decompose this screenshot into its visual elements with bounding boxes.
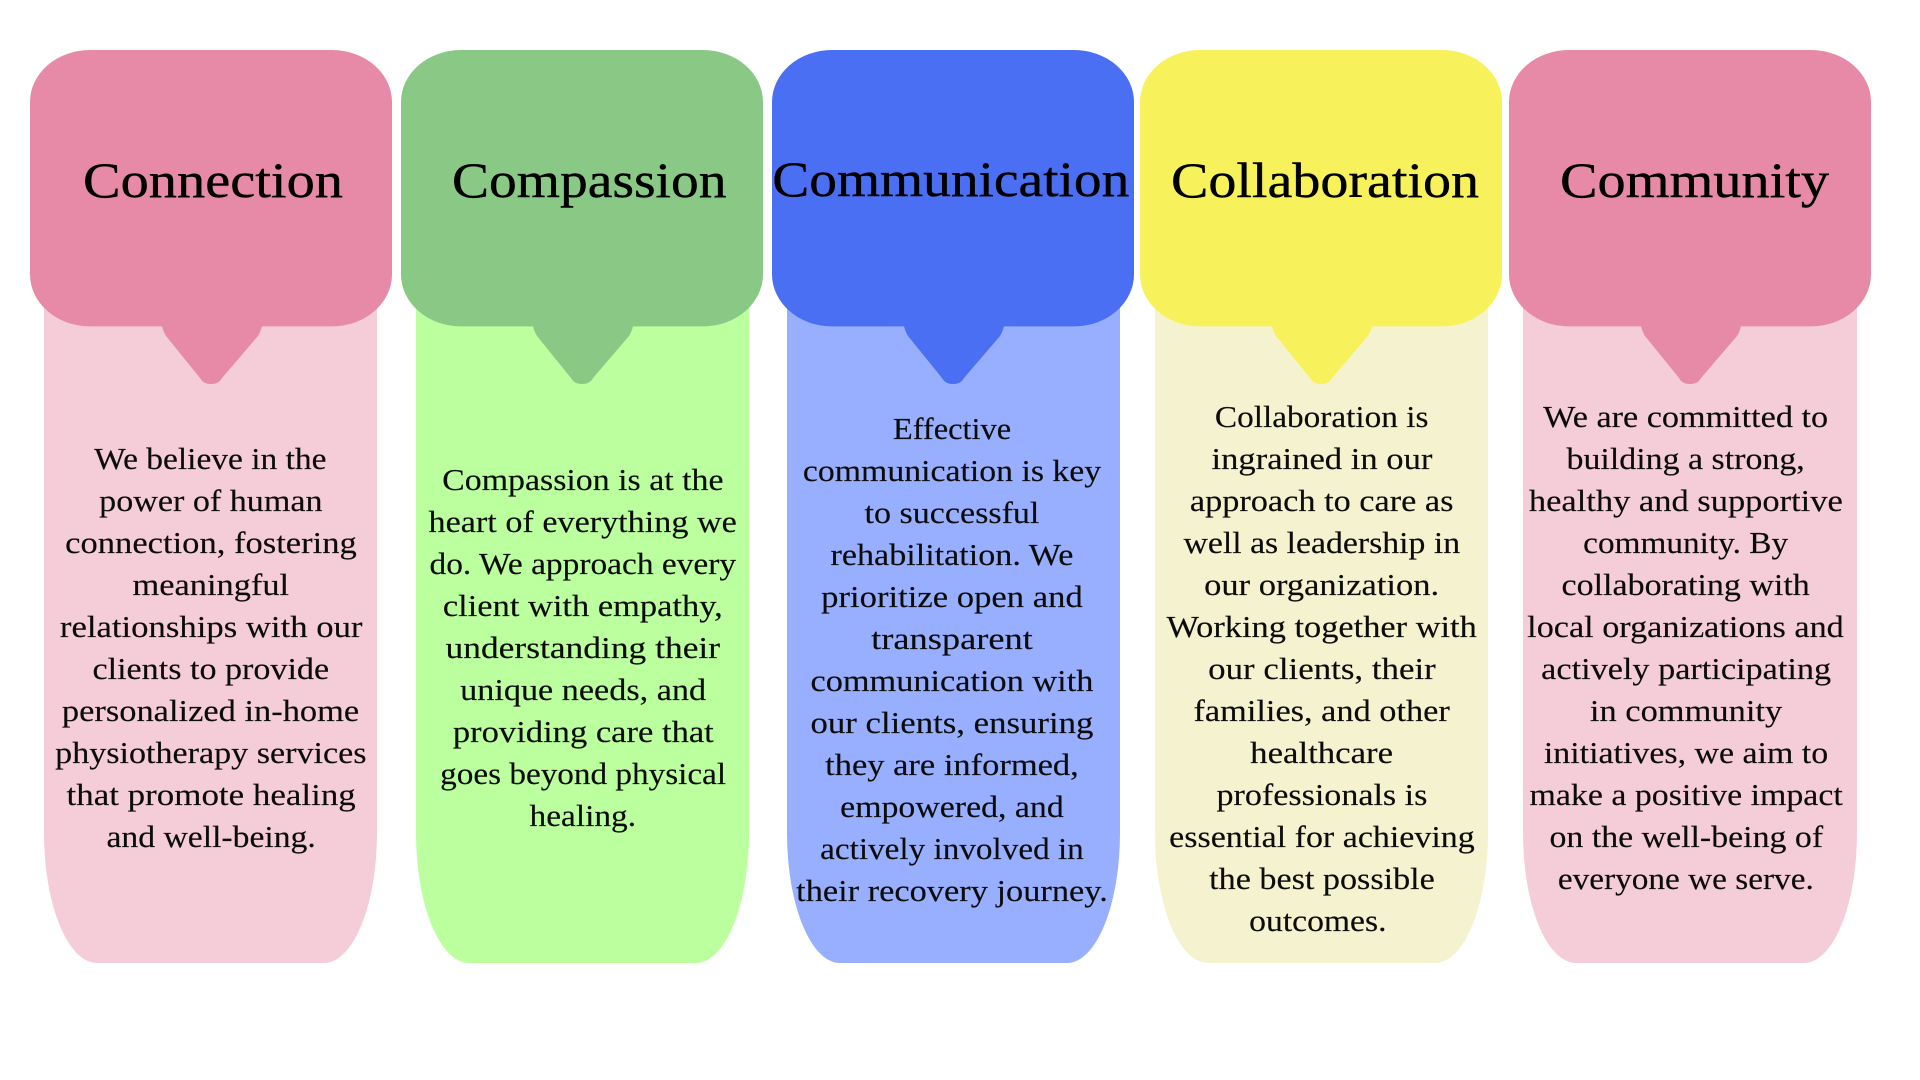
body text: Communication: Effective	[893, 411, 1011, 446]
body text: Community: initiatives, we aim to	[1544, 735, 1828, 770]
body text: Compassion: healing.	[530, 798, 636, 833]
body text: Community: building a strong,	[1566, 441, 1805, 476]
heading: Compassion: Compassion	[452, 152, 726, 208]
panel: Collaboration	[1140, 50, 1502, 963]
body panel: Collaboration	[1155, 220, 1488, 963]
body text: Communication: communication with	[810, 663, 1094, 698]
body text: Connection: clients to provide	[92, 651, 329, 686]
body text: Connection: connection, fostering	[65, 525, 357, 560]
body panel: Communication	[787, 220, 1120, 963]
body text: Community: in community	[1590, 693, 1783, 728]
body text: Compassion: client with empathy,	[443, 588, 723, 623]
body text: Communication	[796, 411, 1108, 908]
body text: Connection: relationships with our	[60, 609, 363, 644]
speech bubble header: Compassion	[401, 50, 763, 384]
body text: Community: We are committed to	[1543, 399, 1828, 434]
body text: Community: healthy and supportive	[1529, 483, 1843, 518]
body text: Collaboration: the best possible	[1209, 861, 1435, 896]
body text: Community: collaborating with	[1562, 567, 1810, 602]
body text: Connection	[55, 441, 366, 854]
body text: Connection: physiotherapy services	[55, 735, 366, 770]
body text: Collaboration: outcomes.	[1249, 903, 1386, 938]
body text: Collaboration: Working together with	[1166, 609, 1477, 644]
body text: Collaboration: well as leadership in	[1184, 525, 1461, 560]
body text: Compassion: goes beyond physical	[440, 756, 726, 791]
body panel: Connection	[44, 220, 377, 963]
body text: Community: community. By	[1583, 525, 1789, 560]
body text: Communication: communication is key	[803, 453, 1102, 488]
body text: Communication: our clients, ensuring	[810, 705, 1093, 740]
speech bubble header: Collaboration	[1140, 50, 1502, 384]
body text: Collaboration	[1166, 399, 1477, 938]
body text: Compassion: unique needs, and	[460, 672, 707, 707]
body text: Communication: transparent	[871, 621, 1033, 656]
body text: Communication: actively involved in	[820, 831, 1084, 866]
body text: Collaboration: professionals is	[1216, 777, 1427, 812]
panel: Communication	[772, 50, 1134, 963]
panel: Community	[1509, 50, 1871, 963]
heading: Connection: Connection	[83, 152, 343, 208]
body text: Communication: their recovery journey.	[796, 873, 1108, 908]
body text: Compassion: understanding their	[446, 630, 721, 665]
body text: Compassion	[428, 462, 737, 833]
body text: Communication: they are informed,	[825, 747, 1079, 782]
body text: Community: make a positive impact	[1530, 777, 1843, 812]
speech bubble header: Community	[1509, 50, 1871, 384]
body text: Collaboration: our clients, their	[1208, 651, 1437, 686]
heading: Communication: Communication	[772, 151, 1129, 207]
body text: Collaboration: our organization.	[1204, 567, 1439, 602]
body text: Community	[1527, 399, 1844, 896]
panel: Compassion	[401, 50, 763, 963]
body text: Communication: empowered, and	[840, 789, 1064, 824]
body text: Community: on the well-being of	[1550, 819, 1824, 854]
body text: Compassion: do. We approach every	[430, 546, 737, 581]
body text: Collaboration: ingrained in our	[1212, 441, 1433, 476]
body text: Communication: to successful	[864, 495, 1039, 530]
body panel: Compassion	[416, 220, 749, 963]
body text: Communication: rehabilitation. We	[830, 537, 1073, 572]
body text: Collaboration: approach to care as	[1190, 483, 1454, 518]
body text: Collaboration: essential for achieving	[1169, 819, 1475, 854]
body text: Connection: and well-being.	[106, 819, 316, 854]
body text: Community: everyone we serve.	[1558, 861, 1814, 896]
body text: Connection: personalized in-home	[62, 693, 359, 728]
body text: Connection: meaningful	[132, 567, 289, 602]
body text: Collaboration: families, and other	[1194, 693, 1451, 728]
heading: Collaboration: Collaboration	[1171, 152, 1479, 208]
speech bubble header: Communication	[772, 50, 1134, 384]
body text: Collaboration: healthcare	[1250, 735, 1393, 770]
heading: Community: Community	[1560, 152, 1829, 208]
body text: Connection: power of human	[99, 483, 323, 518]
body text: Connection: We believe in the	[94, 441, 326, 476]
body text: Community: local organizations and	[1527, 609, 1844, 644]
body text: Community: actively participating	[1541, 651, 1831, 686]
body text: Connection: that promote healing	[66, 777, 356, 812]
body text: Compassion: heart of everything we	[428, 504, 737, 539]
body text: Communication: prioritize open and	[821, 579, 1083, 614]
body text: Compassion: Compassion is at the	[442, 462, 724, 497]
body panel: Community	[1523, 220, 1857, 963]
panel: Connection	[30, 50, 392, 963]
speech bubble header: Connection	[30, 50, 392, 384]
body text: Collaboration: Collaboration is	[1215, 399, 1428, 434]
body text: Compassion: providing care that	[453, 714, 714, 749]
